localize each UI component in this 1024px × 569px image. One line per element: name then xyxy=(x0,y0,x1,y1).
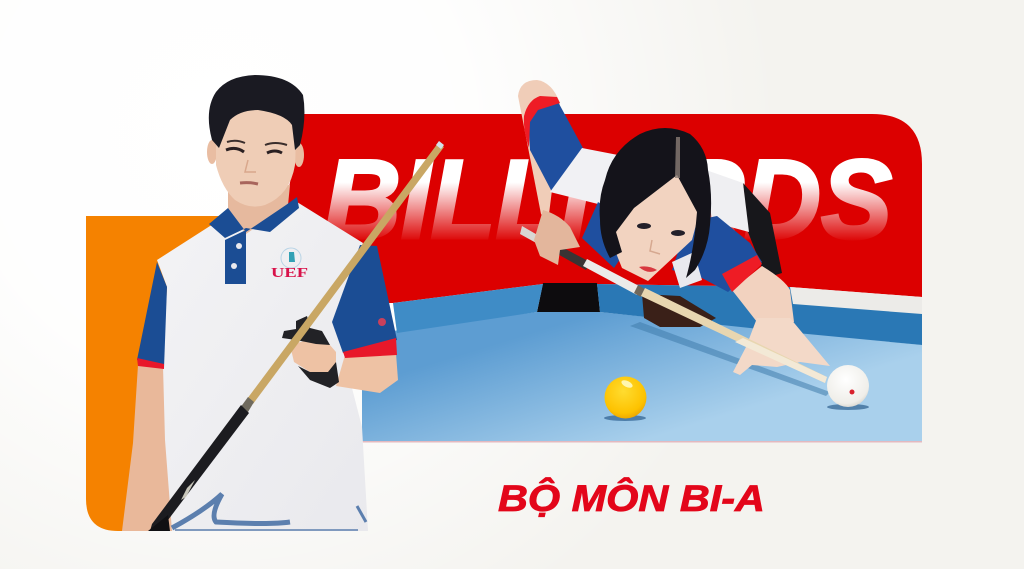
face features xyxy=(637,223,685,272)
player: woman xyxy=(518,80,830,375)
UEF logo xyxy=(271,248,308,281)
black undershirt xyxy=(743,183,782,278)
left sleeve xyxy=(137,262,167,368)
face xyxy=(606,172,700,281)
white shirt lower xyxy=(672,252,702,288)
panel: red block xyxy=(288,114,922,303)
right cuff xyxy=(343,338,397,358)
hair xyxy=(600,128,711,278)
right sleeve xyxy=(332,245,397,353)
right cushion xyxy=(597,284,922,345)
face xyxy=(216,98,296,207)
sleeve logo xyxy=(378,318,386,326)
shirt hem pattern xyxy=(172,494,366,530)
hair part xyxy=(675,137,680,178)
table pocket xyxy=(537,283,600,312)
left cuff xyxy=(137,358,164,369)
raised arm xyxy=(518,80,560,222)
woman's cue xyxy=(520,226,827,383)
blue chest xyxy=(582,202,640,268)
red cuff front xyxy=(722,255,762,292)
left cushion xyxy=(393,284,543,333)
right arm xyxy=(336,340,398,393)
front arm xyxy=(732,266,794,322)
shirt buttons xyxy=(231,243,242,269)
shirt body xyxy=(157,202,368,531)
neck xyxy=(228,185,290,234)
white rail xyxy=(790,287,922,314)
face features xyxy=(226,141,287,184)
panel: orange block xyxy=(86,216,230,531)
left arm xyxy=(122,365,172,531)
man's hand and glove xyxy=(282,316,339,388)
title: BILLIARDS: BILLIARDS xyxy=(324,137,892,262)
cue shadow on felt xyxy=(630,322,830,396)
table felt xyxy=(362,312,922,442)
pool table xyxy=(362,283,922,442)
red cuff raised xyxy=(524,96,560,148)
hair xyxy=(209,75,304,150)
yellow ball xyxy=(604,376,646,421)
cue ball xyxy=(827,365,869,410)
raised sleeve xyxy=(528,100,583,192)
bridge hand front xyxy=(733,318,830,375)
UEF logo: UEF xyxy=(271,266,308,281)
white shoulder xyxy=(550,148,618,205)
player: man xyxy=(122,75,398,531)
right sleeve xyxy=(672,216,762,292)
subtitle: BỘ MÔN BI-A: BỘ MÔN BI-A xyxy=(498,477,765,519)
woman's hand over cue xyxy=(534,210,580,265)
table bottom edge xyxy=(362,441,922,442)
back hair xyxy=(642,294,716,327)
ears xyxy=(207,140,304,167)
placket xyxy=(225,230,246,284)
collar xyxy=(209,197,299,238)
white shirt back xyxy=(706,170,749,232)
man's cue xyxy=(148,141,444,531)
